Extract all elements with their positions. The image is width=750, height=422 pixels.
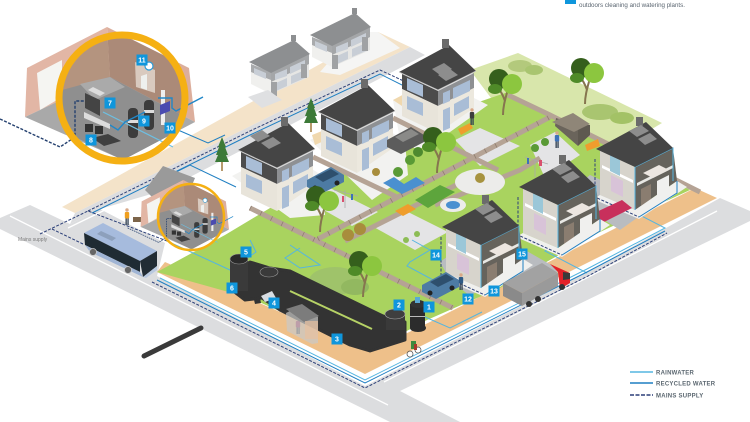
pump room in neighbourhood bbox=[128, 180, 233, 249]
bus bbox=[84, 223, 157, 278]
numbered callouts: 6 bbox=[230, 286, 234, 292]
numbered callouts: 7 bbox=[108, 100, 112, 108]
blue car in driveway bbox=[422, 272, 459, 299]
numbered callouts: 15 bbox=[518, 252, 526, 258]
pump room detail bbox=[0, 27, 203, 160]
numbered callouts: 8 bbox=[89, 138, 93, 144]
paved driveways and plots bbox=[232, 80, 655, 296]
legend: RECYCLED WATER bbox=[656, 382, 716, 388]
truck bbox=[503, 263, 570, 307]
main green lawn bbox=[157, 92, 690, 351]
numbered callouts: 12 bbox=[464, 296, 472, 304]
bus shelter bbox=[286, 304, 319, 344]
numbered callouts: 10 bbox=[166, 126, 174, 132]
numbered callouts: 11 bbox=[138, 58, 146, 64]
underground drain pipe bbox=[144, 328, 201, 356]
pond bbox=[383, 177, 425, 194]
underground rainwater crate tank bbox=[232, 262, 405, 351]
garden fences bbox=[250, 95, 700, 308]
garden shed bbox=[552, 113, 600, 151]
legend: RAINWATER bbox=[656, 370, 695, 376]
clothes line bbox=[334, 157, 548, 208]
numbered callouts: 1 bbox=[427, 304, 431, 312]
numbered callouts: 3 bbox=[335, 336, 339, 344]
numbered callouts bbox=[86, 54, 528, 344]
numbered callouts: 14 bbox=[432, 252, 440, 260]
beige footpath along upper road bbox=[62, 32, 410, 213]
numbered callouts: 13 bbox=[490, 288, 498, 296]
small plant room building roof bbox=[145, 166, 195, 205]
legend bbox=[630, 370, 716, 400]
legend: MAINS SUPPLY bbox=[656, 394, 703, 400]
people in the scene bbox=[125, 108, 559, 334]
back lawn strip bbox=[470, 53, 662, 160]
mains supply label: Mains supply bbox=[18, 237, 48, 243]
cars beside houses bbox=[307, 127, 424, 194]
houses, left row bbox=[238, 39, 476, 211]
cropped caption text bbox=[565, 0, 685, 9]
cyclist bbox=[407, 341, 421, 357]
gray neighbouring houses bbox=[248, 8, 400, 108]
numbered callouts: 4 bbox=[272, 300, 276, 308]
numbered callouts: 9 bbox=[142, 118, 146, 126]
round tanks bbox=[230, 254, 426, 332]
underground pipe runs bbox=[40, 70, 667, 388]
gold magnifier ring, small bbox=[158, 184, 224, 250]
numbered callouts: 2 bbox=[397, 302, 401, 310]
cutaway houses, right row bbox=[439, 117, 687, 297]
cropped caption text: outdoors cleaning and watering plants. bbox=[579, 2, 685, 9]
trees bbox=[215, 58, 604, 297]
soil band around development bbox=[157, 188, 717, 374]
numbered callouts: 5 bbox=[244, 250, 248, 256]
garden features: bench, planters and flower beds bbox=[309, 123, 549, 295]
maintenance equipment bbox=[254, 291, 276, 304]
gold magnifier ring, large bbox=[59, 35, 185, 161]
